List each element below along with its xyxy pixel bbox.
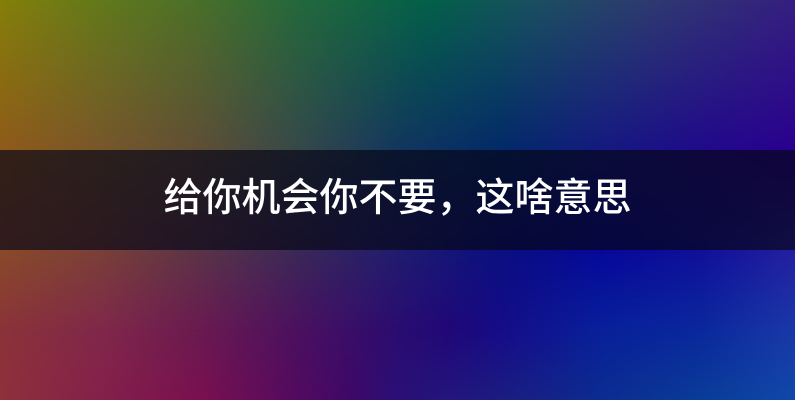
dark title band	[0, 150, 795, 250]
title: 给你机会你不要，这啥意思	[163, 177, 632, 220]
